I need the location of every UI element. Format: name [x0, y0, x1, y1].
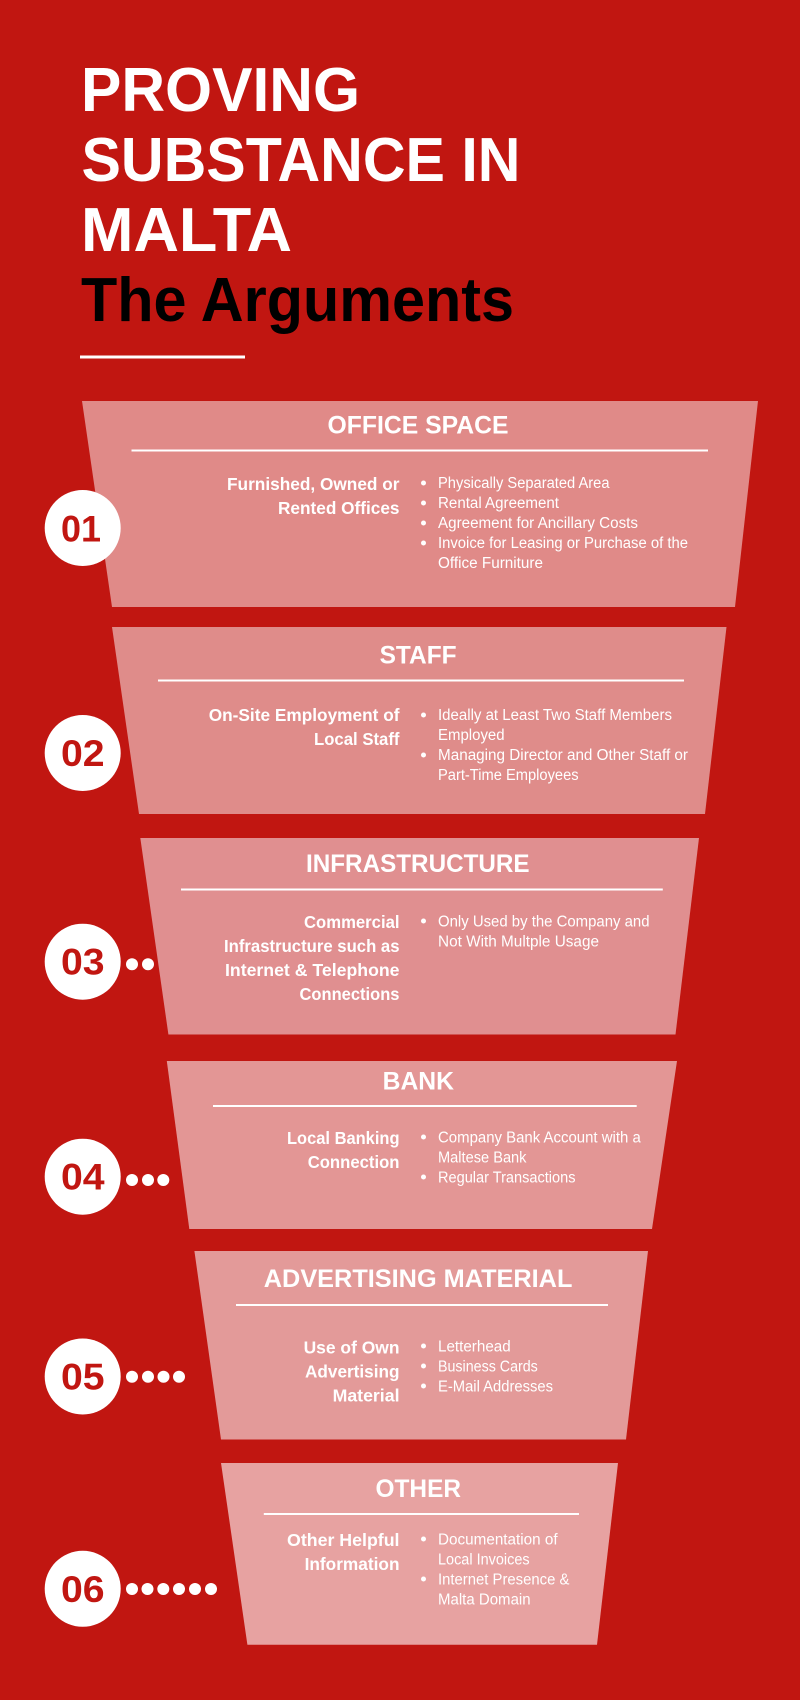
panel: office space [82, 401, 758, 607]
bullet list: advertising material: Business Cards [438, 1358, 538, 1375]
subtitle: The Arguments [81, 266, 514, 335]
dots: 06 [126, 1583, 217, 1595]
badge: 03: 03 [61, 942, 105, 982]
bullet list: staff: Ideally at Least Two Staff Members [438, 707, 672, 724]
badge: 06 [45, 1551, 121, 1627]
lead text: infrastructure: Commercial [304, 912, 400, 932]
title: PROVING [81, 56, 360, 125]
bullet list: staff: Employed [438, 727, 505, 744]
bullet list: bank: Company Bank Account with a [438, 1129, 641, 1146]
heading: infrastructure: INFRASTRUCTURE [306, 850, 530, 878]
bullet list: other: Malta Domain [438, 1591, 531, 1608]
bullet list: infrastructure: Only Used by the Company and [438, 913, 650, 930]
bullet list: advertising material: E-Mail Addresses [438, 1378, 553, 1395]
lead text: other: Information [305, 1554, 400, 1574]
bullet list: office space: Rental Agreement [438, 495, 560, 512]
bullet list: other: Internet Presence & [438, 1571, 570, 1588]
lead text: advertising material: Material [333, 1385, 400, 1405]
bullet list: other [421, 1531, 570, 1608]
lead text: staff: Local Staff [314, 729, 400, 749]
lead text: advertising material: Use of Own [304, 1337, 400, 1357]
bullet list: infrastructure [421, 913, 650, 950]
panel: other [221, 1463, 618, 1645]
lead text: infrastructure: Infrastructure such as [224, 936, 400, 956]
lead text: office space [227, 474, 400, 518]
bullet list: infrastructure: Not With Multple Usage [438, 933, 599, 950]
panel: bank [167, 1061, 677, 1229]
bullet list: office space: Physically Separated Area [438, 475, 610, 492]
heading: advertising material: ADVERTISING MATERIAL [264, 1265, 572, 1293]
bullet list: staff: Part-Time Employees [438, 767, 579, 784]
lead text: staff [209, 705, 400, 749]
panel: staff [112, 627, 726, 814]
lead text: infrastructure: Connections [300, 984, 400, 1004]
badge: 01: 01 [61, 508, 101, 550]
bullet list: office space [421, 475, 688, 572]
heading: staff: STAFF [380, 642, 457, 670]
lead text: bank: Local Banking [287, 1128, 400, 1148]
bullet list: other: Documentation of [438, 1531, 558, 1548]
title [81, 56, 520, 265]
panel: advertising material [194, 1251, 648, 1440]
dots: 05 [126, 1371, 185, 1383]
badge: 06: 06 [61, 1569, 105, 1610]
lead text: infrastructure: Internet & Telephone [225, 960, 400, 980]
lead text: office space: Furnished, Owned or [227, 474, 400, 494]
badge: 05 [45, 1338, 121, 1414]
bullet list: bank [421, 1129, 641, 1186]
badge: 02 [45, 715, 121, 791]
dots: 04 [126, 1174, 169, 1186]
lead text: advertising material: Advertising [305, 1361, 400, 1381]
bullet list: other: Local Invoices [438, 1551, 530, 1568]
lead text: staff: On-Site Employment of [209, 705, 400, 725]
lead text: other: Other Helpful [287, 1530, 400, 1550]
badge: 03 [45, 924, 121, 1000]
badge: 04 [45, 1139, 121, 1215]
bullet list: staff: Managing Director and Other Staff or [438, 747, 688, 764]
badge: 04: 04 [61, 1156, 105, 1198]
heading: office space: OFFICE SPACE [328, 412, 508, 440]
bullet list: staff [421, 707, 688, 784]
bullet list: bank: Regular Transactions [438, 1169, 576, 1186]
bullet list: office space: Agreement for Ancillary Costs [438, 515, 638, 532]
bullet list: office space: Invoice for Leasing or Purchase of the [438, 535, 688, 552]
lead text: bank: Connection [308, 1152, 400, 1172]
bullet list: office space: Office Furniture [438, 555, 543, 572]
title: MALTA [81, 196, 292, 265]
lead text: bank [287, 1128, 400, 1172]
panel: infrastructure [140, 838, 699, 1034]
lead text: office space: Rented Offices [278, 498, 400, 518]
lead text: advertising material [304, 1337, 400, 1405]
heading: other: OTHER [376, 1475, 461, 1503]
dots: 03 [126, 958, 154, 970]
heading: bank: BANK [383, 1068, 454, 1096]
lead text: infrastructure [224, 912, 400, 1004]
bullet list: bank: Maltese Bank [438, 1149, 527, 1166]
badge: 05: 05 [61, 1356, 105, 1398]
bullet list: advertising material [421, 1338, 553, 1395]
lead text: other [287, 1530, 400, 1574]
bullet list: advertising material: Letterhead [438, 1338, 511, 1355]
badge: 01 [45, 490, 121, 566]
title: SUBSTANCE IN [82, 126, 520, 195]
badge: 02: 02 [61, 733, 105, 774]
